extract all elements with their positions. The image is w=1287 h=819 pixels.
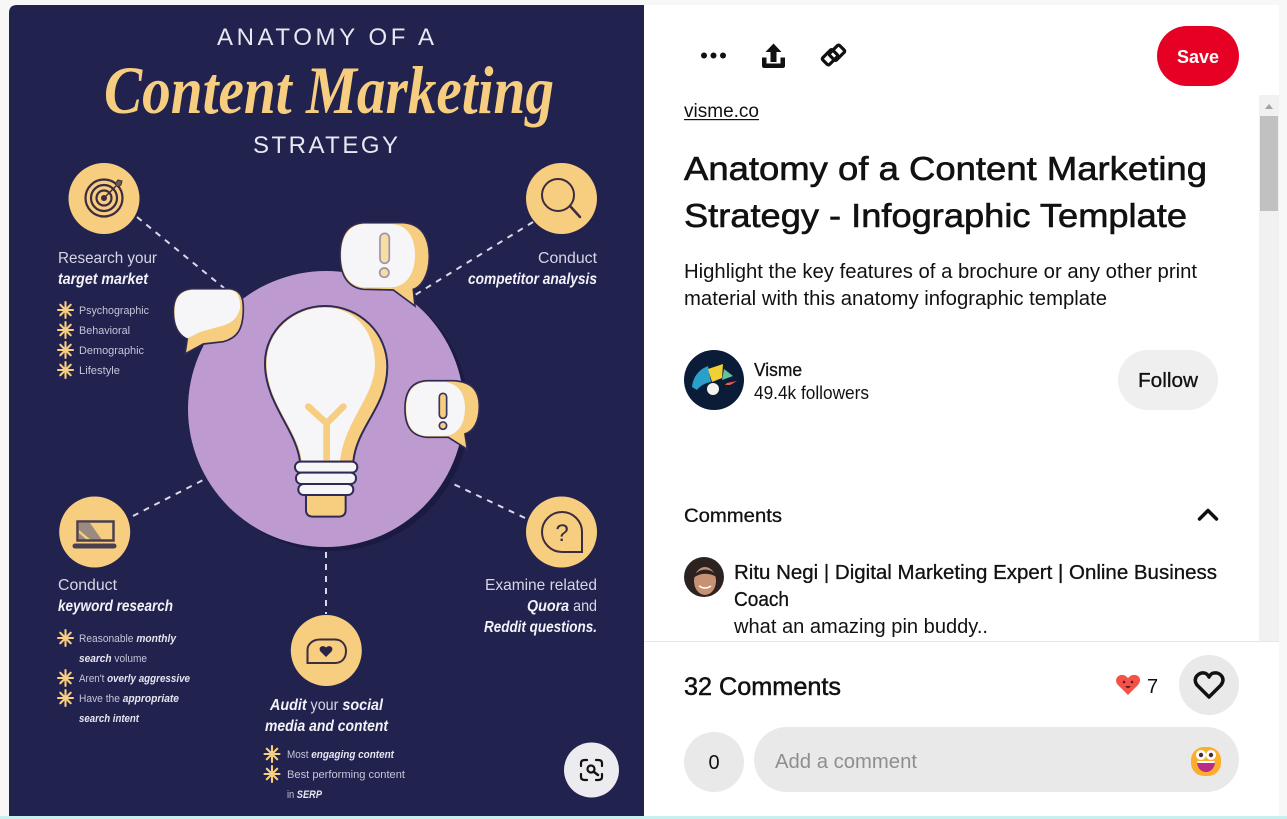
description: [684, 261, 1197, 310]
text block: research target market: Demographic: [79, 345, 144, 357]
follow button: [1118, 350, 1218, 410]
text block: research target market: Research your: [58, 250, 158, 267]
icon: share upload: [762, 44, 785, 68]
text block: audit social media: in SERP: [287, 789, 323, 801]
text block: keyword research: search volume: [79, 653, 147, 665]
dashed connectors: [133, 217, 533, 614]
profile name: 49.4k followers: [754, 383, 869, 403]
text block: keyword research: [58, 577, 190, 725]
text block: quora and reddit: Reddit questions.: [484, 619, 597, 636]
speech bubble: left: [173, 289, 243, 354]
text block: audit social media: [264, 697, 405, 801]
text block: research target market: [58, 250, 158, 378]
comment text: [733, 562, 1217, 638]
profile name: [754, 360, 869, 403]
reaction count: 7: [1147, 676, 1158, 698]
lightbulb: [265, 306, 387, 517]
text block: keyword research: search intent: [79, 713, 140, 725]
text block: research target market: Lifestyle: [79, 365, 120, 377]
visual search button: [564, 742, 619, 798]
text block: quora and reddit: Examine related: [485, 577, 597, 594]
text block: research target market: Psychographic: [79, 305, 149, 317]
text block: audit social media: Audit your social: [269, 697, 383, 714]
save button: Save: [1177, 47, 1219, 67]
text block: keyword research: Aren't overly aggressive: [79, 673, 190, 685]
comment text: what an amazing pin buddy..: [733, 616, 988, 638]
icon: heart message: [291, 615, 362, 686]
icon: question bubble: ?: [555, 520, 569, 547]
description: Highlight the key features of a brochure or any other print: [684, 261, 1197, 283]
icon: more options: [701, 52, 726, 58]
central circle with lightbulb and speech bubbles: [173, 223, 479, 551]
comment count badge: 0: [708, 752, 720, 774]
speech bubble: top: [340, 223, 429, 306]
icon: magnifying glass: [526, 163, 597, 234]
text block: audit social media: Best performing content: [287, 769, 405, 781]
icon: laptop: [59, 496, 130, 568]
icon: target: [68, 163, 140, 234]
text block: research target market: target market: [58, 271, 149, 288]
text block: research target market: Behavioral: [79, 325, 130, 337]
text block: competitor analysis: competitor analysis: [468, 271, 597, 288]
icon: Visme avatar: [684, 350, 744, 410]
save button: [1157, 26, 1239, 86]
text block: audit social media: media and content: [265, 718, 389, 735]
heading: [684, 150, 1207, 234]
comment avatar: [684, 557, 724, 597]
title: ANATOMY OF A: [217, 24, 434, 51]
panel: infographic: [9, 5, 644, 816]
title: [104, 24, 554, 159]
comments heading: Comments: [684, 506, 782, 527]
text block: competitor analysis: Conduct: [538, 250, 598, 267]
comment count: 32 Comments: [684, 673, 841, 701]
comments heading: [684, 506, 1216, 527]
icon: heart emoji reactions: [1116, 675, 1140, 695]
text block: keyword research: Conduct: [58, 577, 118, 594]
profile name: Visme: [754, 360, 802, 380]
comment input: [754, 727, 1239, 792]
heading: Anatomy of a Content Marketing: [684, 150, 1207, 187]
text block: quora and reddit: Quora and: [527, 598, 597, 615]
comment count badge: [684, 732, 744, 792]
follow button: Follow: [1138, 370, 1199, 392]
description: material with this anatomy infographic template: [684, 288, 1107, 310]
footer: [644, 641, 1279, 816]
scrollbar: [1259, 95, 1279, 641]
icon: grinning emoji: [1191, 747, 1221, 776]
source link: visme.co: [684, 101, 759, 122]
speech bubble: right: [405, 381, 479, 449]
heart button: [1179, 655, 1239, 715]
text block: keyword research: Have the appropriate: [79, 693, 179, 705]
title: Content Marketing: [104, 52, 554, 128]
title: STRATEGY: [253, 132, 398, 159]
text block: competitor analysis: [468, 250, 598, 288]
text block: quora and reddit: [484, 577, 597, 636]
heading: Strategy - Infographic Template: [684, 197, 1187, 234]
comment input: Add a comment: [775, 751, 917, 773]
comment text: Ritu Negi | Digital Marketing Expert | Online Business: [734, 562, 1217, 584]
text block: audit social media: Most engaging content: [287, 749, 395, 761]
icon: question bubble: [526, 496, 597, 568]
icon: link: [822, 44, 845, 66]
text block: keyword research: keyword research: [58, 598, 173, 615]
panel: pin details: [644, 5, 1279, 816]
text block: keyword research: Reasonable monthly: [79, 633, 177, 645]
comment text: Coach: [734, 589, 789, 611]
